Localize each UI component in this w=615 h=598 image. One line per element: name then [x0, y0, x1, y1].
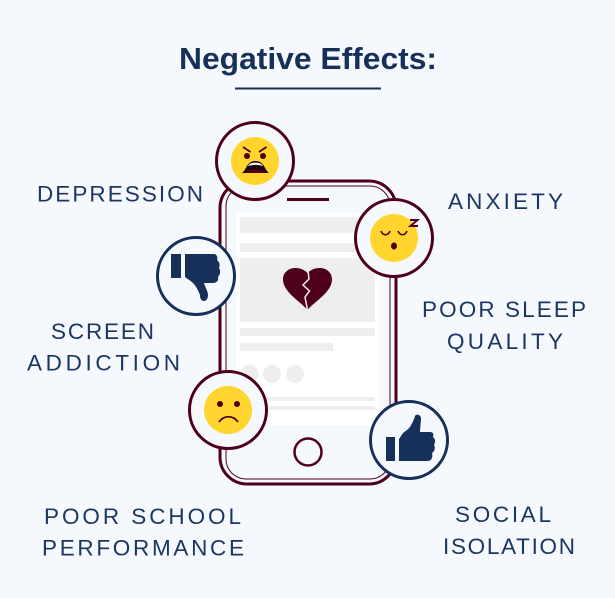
label: poor sleep quality	[422, 297, 586, 354]
phone screen	[236, 213, 379, 425]
label: poor school performance: PERFORMANCE	[42, 536, 244, 560]
label: screen addiction: ADDICTION	[27, 350, 180, 376]
icon: sleepy face	[356, 200, 432, 276]
label: social isolation: ISOLATION	[443, 534, 575, 559]
title: Negative Effects:	[179, 41, 437, 76]
label: poor sleep quality: QUALITY	[447, 329, 563, 354]
label: anxiety: ANXIETY	[448, 189, 563, 214]
label: poor school performance: POOR SCHOOL	[44, 504, 241, 529]
label: screen addiction: SCREEN	[51, 319, 154, 344]
icon: sad face	[190, 372, 266, 448]
icon: thumbs up	[370, 402, 448, 478]
label: poor sleep quality: POOR SLEEP	[422, 297, 586, 322]
label: social isolation	[443, 502, 575, 559]
icon: angry face	[216, 122, 294, 200]
icon: broken heart	[283, 268, 332, 310]
phone	[220, 181, 396, 484]
label: screen addiction	[27, 319, 180, 376]
icon: thumbs down	[158, 238, 234, 314]
phone home button	[294, 438, 322, 466]
label: depression: DEPRESSION	[37, 182, 203, 206]
label: social isolation: SOCIAL	[455, 502, 551, 527]
label: poor school performance	[42, 504, 244, 560]
phone speaker	[287, 198, 329, 201]
